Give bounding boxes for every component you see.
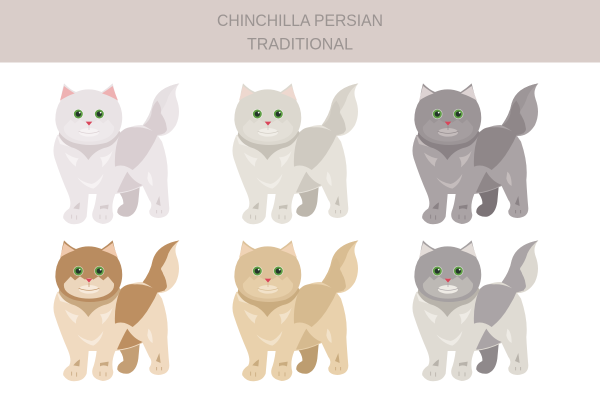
cat: golden-brown chinchilla <box>53 240 179 381</box>
cat: cream chinchilla <box>232 240 358 381</box>
cat: white chinchilla <box>53 83 179 224</box>
cat: silver-cream chinchilla <box>232 83 358 224</box>
header band <box>0 0 600 62</box>
cat: grey and cream chinchilla <box>412 240 538 381</box>
title: TRADITIONAL <box>247 36 353 54</box>
title: CHINCHILLA PERSIAN <box>217 12 383 30</box>
title <box>217 12 383 54</box>
cat: blue-grey chinchilla <box>412 83 538 224</box>
